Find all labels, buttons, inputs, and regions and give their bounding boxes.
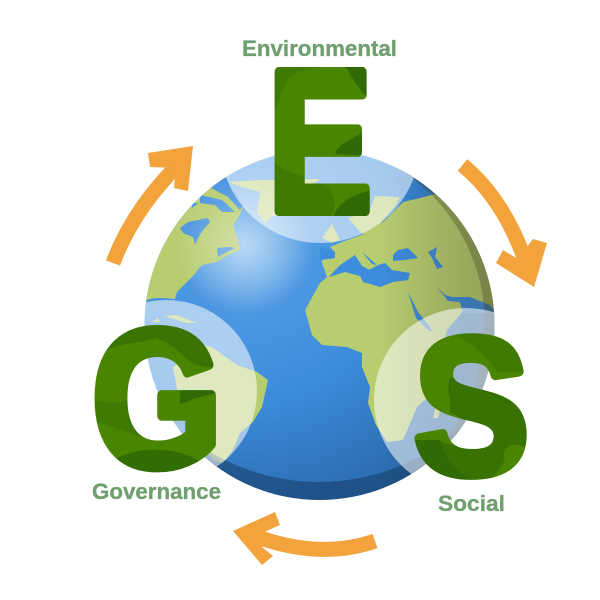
globe [144, 155, 494, 500]
continent: South America [173, 345, 268, 463]
arrow: bottom [233, 512, 375, 565]
continents: Eurasia and Africa [305, 194, 500, 442]
dark right crescent [402, 170, 494, 480]
sheen [184, 186, 306, 306]
arrow: top left [113, 146, 193, 263]
continents: North America [146, 176, 243, 300]
ESG infographic [92, 40, 547, 565]
right shading [396, 178, 494, 466]
continents: Greenland [228, 179, 320, 223]
dark bottom crescent [178, 426, 462, 500]
continent: Madagascar and Caribbean [152, 315, 441, 418]
letter G: G [92, 290, 222, 508]
label: Social: Social [438, 491, 505, 516]
letter S: S [414, 298, 529, 514]
arrow: top right [462, 165, 547, 287]
label: Environmental: Environmental [242, 36, 397, 61]
continents: Scandinavia and Britain [322, 196, 400, 243]
continents: Hudson Bay and arctic water [180, 177, 243, 257]
seas: Mediterranean, Black Sea, Caspian, Red Sea, Persian Gulf [320, 247, 496, 332]
label: Governance: Governance [92, 479, 221, 504]
bubble overlay: G [144, 300, 257, 466]
bubble overlay: S [374, 308, 494, 474]
bubble overlay: E [226, 155, 414, 243]
letter E: E [268, 28, 372, 254]
